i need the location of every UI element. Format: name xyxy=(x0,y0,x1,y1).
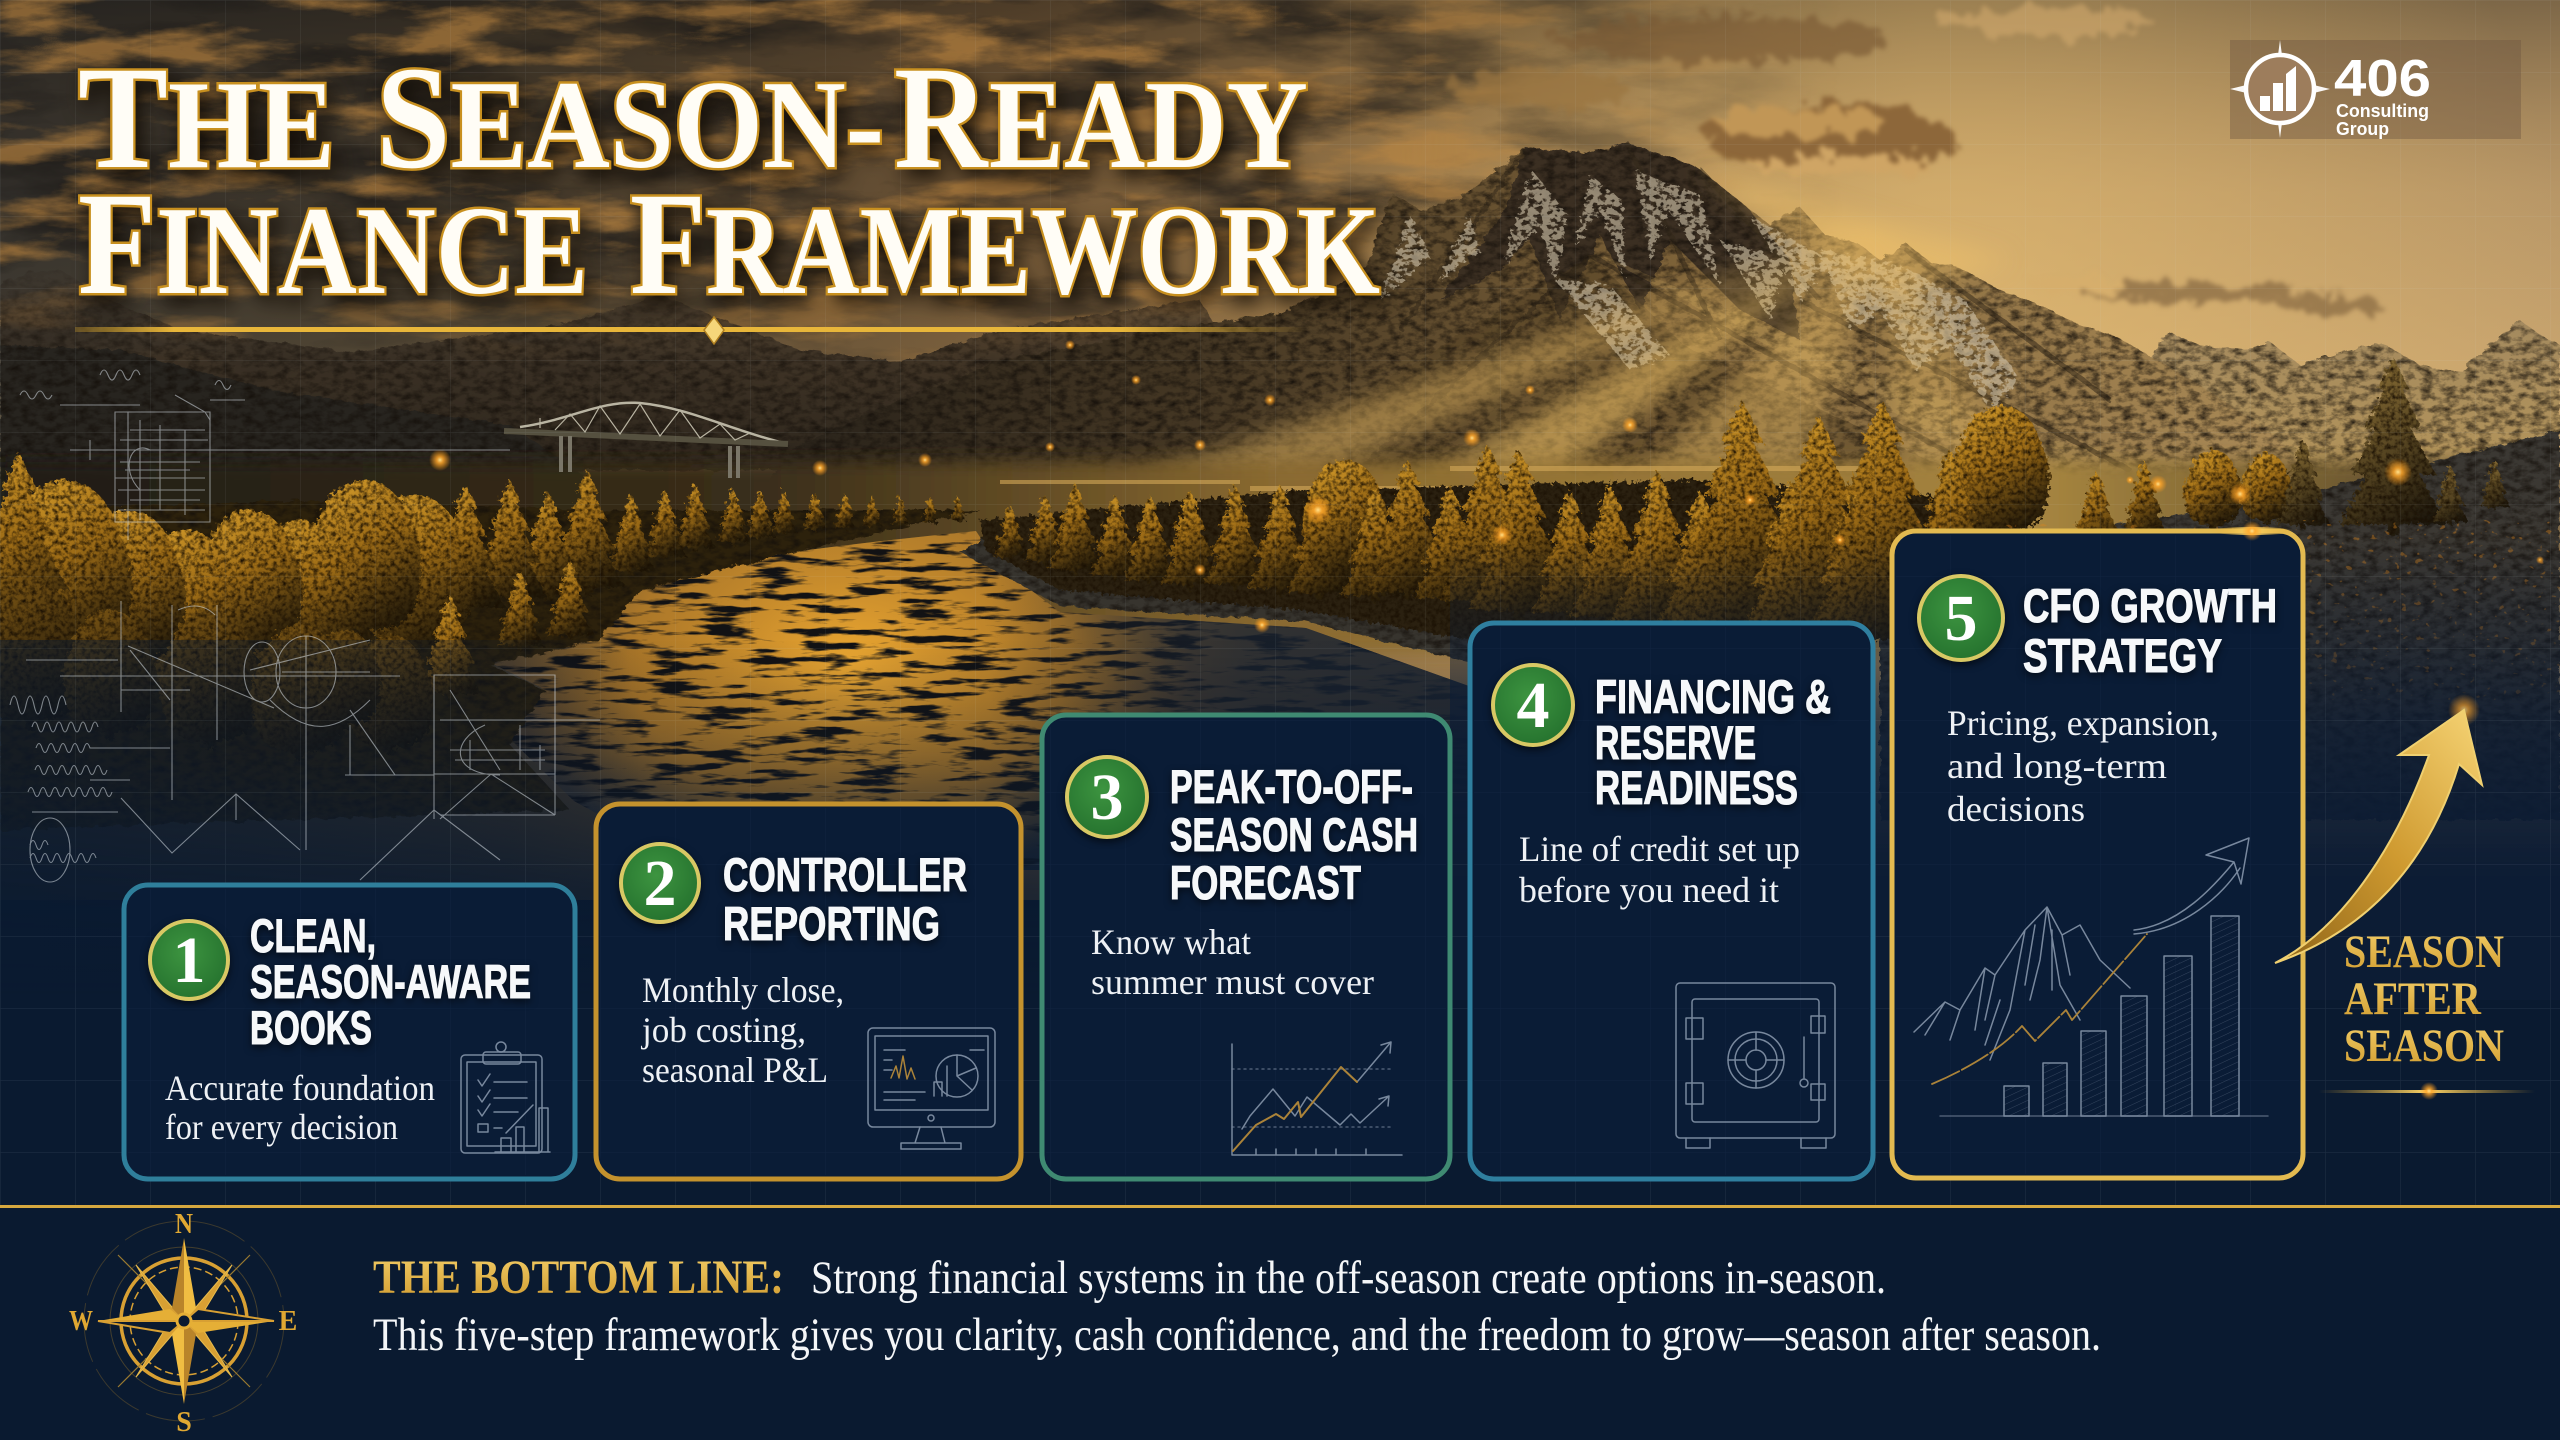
description 2: job costing, xyxy=(640,1010,806,1050)
title xyxy=(78,36,1380,325)
badge 4: 4 xyxy=(1516,669,1550,742)
badge 2: 2 xyxy=(644,847,676,920)
icon: mountain with growth bars xyxy=(1914,838,2268,1116)
description 1: for every decision xyxy=(165,1107,398,1147)
title: FRAMEWORK xyxy=(630,162,1380,325)
heading 3 xyxy=(1170,760,1418,909)
callout: season after season: SEASON xyxy=(2344,1020,2504,1072)
background: ember specks xyxy=(1900,520,2560,700)
background: bridge xyxy=(504,403,788,478)
icon: compass chart logo xyxy=(2230,40,2330,138)
badge 2 xyxy=(621,844,699,922)
badge 1 xyxy=(150,921,228,999)
badge 4 xyxy=(1493,665,1573,745)
title: READY xyxy=(894,36,1308,199)
heading 1: CLEAN, xyxy=(250,909,376,962)
heading 4: FINANCING & xyxy=(1595,670,1831,723)
title: SEASON- xyxy=(376,36,884,199)
icon: compass rose xyxy=(69,1209,297,1438)
heading 4 xyxy=(1595,670,1831,814)
arrow: season after season growth xyxy=(2275,694,2482,963)
bottom line text: This five-step framework gives you clarity, cash confidence, and the freedom to grow—season after season. xyxy=(373,1309,2101,1361)
description 1 xyxy=(165,1068,435,1147)
bottom line text: Strong financial systems in the off-season create options in-season. xyxy=(811,1252,1886,1304)
background: river xyxy=(494,531,1468,870)
callout: season after season: SEASON xyxy=(2344,926,2504,978)
callout: season after season xyxy=(2319,926,2535,1100)
logo name: Consulting xyxy=(2336,101,2429,121)
heading 2: REPORTING xyxy=(723,897,940,950)
background: lower shaded trees xyxy=(0,580,433,760)
description 3: summer must cover xyxy=(1091,962,1374,1002)
description 1: Accurate foundation xyxy=(165,1068,435,1108)
bottom line text: THE BOTTOM LINE: xyxy=(373,1251,784,1304)
background: left forest shadow xyxy=(0,500,980,830)
description 4: Line of credit set up xyxy=(1519,829,1800,869)
compass letter W: W xyxy=(69,1306,93,1337)
background: right forest shadow xyxy=(980,480,2040,640)
logo name line two: Group xyxy=(2336,119,2389,139)
background: right hillside xyxy=(1880,430,2560,820)
logo xyxy=(2230,40,2521,139)
background: mountain snow xyxy=(1380,170,2020,410)
icon: clipboard xyxy=(461,1042,550,1153)
background: lit plain strips xyxy=(1000,466,1870,491)
background: glowing sparks xyxy=(429,340,2544,633)
bottom line text xyxy=(373,1251,2101,1361)
background: navy fade xyxy=(0,540,2560,1440)
heading 3: FORECAST xyxy=(1170,856,1361,909)
compass letter S: S xyxy=(176,1407,192,1438)
logo number: 406 xyxy=(2334,50,2431,108)
heading 3: PEAK-TO-OFF- xyxy=(1170,760,1413,813)
icon: monitor dashboard xyxy=(868,1028,995,1149)
description 5: Pricing, expansion, xyxy=(1947,703,2219,743)
bottom band xyxy=(0,1205,2560,1440)
background: sun rays xyxy=(1130,170,2030,490)
description 4 xyxy=(1519,829,1800,910)
description 3: Know what xyxy=(1091,922,1251,962)
description 5 xyxy=(1947,703,2219,829)
description 2: Monthly close, xyxy=(642,970,844,1010)
background: distant mountain ranges xyxy=(0,270,2560,490)
background: valley xyxy=(0,462,2560,652)
description 2: seasonal P&L xyxy=(642,1050,828,1090)
compass letter E: E xyxy=(279,1306,297,1337)
badge 1: 1 xyxy=(172,924,206,997)
description 4: before you need it xyxy=(1519,870,1779,910)
panel: step 3 xyxy=(1042,715,1450,1179)
badge 3: 3 xyxy=(1090,761,1124,834)
background: far-right dark pines xyxy=(2276,357,2510,535)
icon: forecast line chart xyxy=(1232,1042,1402,1155)
heading 5: STRATEGY xyxy=(2023,629,2222,682)
heading 1 xyxy=(250,909,531,1054)
background: right river bank xyxy=(960,530,1480,665)
callout: season after season: AFTER xyxy=(2344,973,2482,1025)
heading 4: RESERVE xyxy=(1595,716,1756,769)
icon: safe xyxy=(1676,983,1835,1148)
heading 2: CONTROLLER xyxy=(723,848,967,901)
badge 3 xyxy=(1067,757,1147,837)
description 2 xyxy=(640,970,844,1090)
heading 1: SEASON-AWARE xyxy=(250,955,531,1008)
panel: step 2 xyxy=(596,804,1021,1179)
heading 1: BOOKS xyxy=(250,1001,372,1054)
badge 5: 5 xyxy=(1944,582,1978,655)
panel: step 1 xyxy=(124,885,575,1179)
heading 5 xyxy=(2023,579,2277,682)
heading 4: READINESS xyxy=(1595,761,1798,814)
background: blueprint sketches xyxy=(10,370,600,882)
background: sky xyxy=(0,0,2560,900)
title: FINANCE xyxy=(78,162,588,325)
panel: step 5 xyxy=(1892,521,2303,1178)
heading 2 xyxy=(723,848,967,950)
compass letter N: N xyxy=(175,1209,193,1240)
description 5: decisions xyxy=(1947,789,2085,829)
description 3 xyxy=(1091,922,1374,1002)
description 5: and long-term xyxy=(1947,746,2167,786)
background: clouds xyxy=(0,0,2386,358)
background: trees xyxy=(0,400,2292,700)
badge 5 xyxy=(1919,576,2003,660)
panel: step 4 xyxy=(1470,623,1873,1179)
heading 3: SEASON CASH xyxy=(1170,808,1418,861)
heading 5: CFO GROWTH xyxy=(2023,579,2277,632)
background: main mountain xyxy=(760,143,2320,490)
title divider xyxy=(75,317,1307,344)
title: THE xyxy=(78,36,335,199)
